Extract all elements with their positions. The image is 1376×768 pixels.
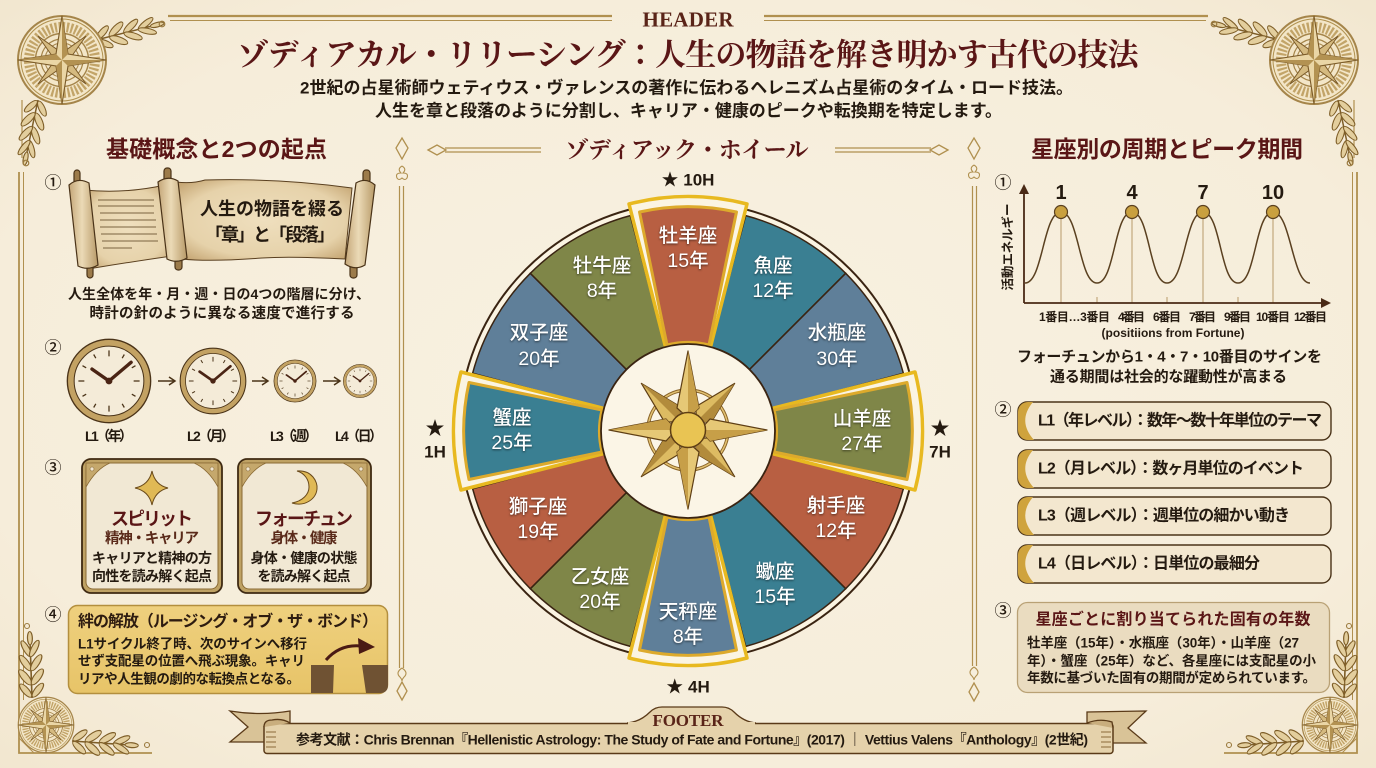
number 2: ② xyxy=(994,400,1012,420)
sign labels: 15年 xyxy=(754,586,796,608)
house marker 1H: ★ xyxy=(425,418,445,440)
chart: activity energy: 活動エネルギー xyxy=(1000,204,1015,290)
chart: activity energy: 4番目 xyxy=(1118,310,1145,324)
panel: left column xyxy=(44,136,388,694)
chart: activity energy: 1 xyxy=(1055,182,1067,204)
level L2: L2（月レベル）：数ヶ月単位のイベント xyxy=(1038,458,1304,478)
card: fortune: フォーチュン xyxy=(255,509,353,529)
number 1: ① xyxy=(44,174,62,192)
callout: loosing of the bond xyxy=(68,606,388,694)
icon: leap between cliffs xyxy=(311,638,388,693)
sign labels: 12年 xyxy=(752,280,794,302)
callout: fixed years: 牡羊座（15年）・水瓶座（30年）・山羊座（27 xyxy=(1027,634,1299,650)
sign labels: 27年 xyxy=(841,433,883,455)
sign labels: 20年 xyxy=(518,348,560,370)
heading: basics: 基礎概念と2つの起点 xyxy=(106,136,327,162)
house marker 1H: 1H xyxy=(424,442,446,462)
text: fortune signs: 通る期間は社会的な躍動性が高まる xyxy=(1050,368,1287,386)
sign labels: 25年 xyxy=(491,432,533,454)
house marker 4H: ★ 4H xyxy=(666,678,710,696)
callout: fixed years: 星座ごとに割り当てられた固有の年数 xyxy=(1036,610,1310,628)
footer ribbon xyxy=(230,707,1146,754)
sign labels: 天秤座 xyxy=(659,601,717,623)
chart: activity energy: 7 xyxy=(1197,182,1209,204)
icon: scroll: 「章」と「段落」 xyxy=(205,225,335,245)
corner ornament: top left xyxy=(11,10,167,168)
chart: activity energy: 9番目 xyxy=(1224,310,1251,324)
sign labels: 8年 xyxy=(673,626,703,648)
card: spirit: 精神・キャリア xyxy=(105,529,199,547)
card: fortune: 身体・健康の状態 xyxy=(250,550,358,566)
arrow xyxy=(252,377,268,385)
wheel xyxy=(453,196,923,666)
footer tab xyxy=(627,707,756,723)
clock L2 xyxy=(180,348,246,444)
references: 参考文献：Chris Brennan『Hellenistic Astrology: The Study of Fate and Fortune』(2017) ｜ Vettius Valens『Anthology』(2世紀) xyxy=(296,732,1088,748)
level L3 xyxy=(1018,497,1331,535)
panel: right column xyxy=(994,136,1331,692)
house marker 1H xyxy=(424,418,446,462)
arrow xyxy=(323,377,340,385)
level L1 xyxy=(1018,402,1331,440)
clock L4: L4（日） xyxy=(335,428,383,444)
icon: crescent moon xyxy=(292,471,317,504)
corner ornament: bottom left xyxy=(15,624,150,760)
card: fortune: を読み解く起点 xyxy=(258,568,350,584)
chart: activity energy: 6番目 xyxy=(1153,310,1181,324)
number 3: ③ xyxy=(994,602,1012,620)
heading ornament right xyxy=(835,145,948,155)
sign labels: 15年 xyxy=(667,250,709,272)
chart: activity energy: 4 xyxy=(1126,182,1138,204)
clock L3: L3（週） xyxy=(270,428,318,444)
chart: activity energy: 12番目 xyxy=(1294,310,1327,324)
chart: activity energy: (positiions from Fortune) xyxy=(1102,326,1244,340)
heading ornament left xyxy=(428,145,541,155)
sign labels: 30年 xyxy=(816,348,858,370)
card: fortune: 身体・健康 xyxy=(270,529,338,547)
arrow xyxy=(158,377,175,385)
sign labels: 19年 xyxy=(517,521,559,543)
level L4: L4（日レベル）：日単位の最細分 xyxy=(1038,554,1260,572)
subtitle: 2世紀の占星術師ウェティウス・ヴァレンスの著作に伝わるヘレニズム占星術のタイム・ロード技法。 xyxy=(300,78,1073,98)
sign labels: 8年 xyxy=(587,280,617,302)
sign labels: 魚座 xyxy=(753,255,793,277)
sign labels: 獅子座 xyxy=(509,496,567,518)
panel: zodiac wheel xyxy=(424,138,951,696)
sign labels: 山羊座 xyxy=(833,408,891,430)
level L3: L3（週レベル）：週単位の細かい動き xyxy=(1038,506,1290,524)
footer label: FOOTER xyxy=(652,711,724,730)
card: spirit: 向性を読み解く起点 xyxy=(92,568,212,584)
sign labels: 20年 xyxy=(579,591,621,613)
sign labels: 射手座 xyxy=(807,495,865,517)
text: fortune signs xyxy=(1017,348,1322,386)
heading: periods: 星座別の周期とピーク期間 xyxy=(1031,136,1303,162)
callout: loosing of the bond: 絆の解放（ルージング・オブ・ザ・ボンド） xyxy=(78,612,378,630)
sign labels: 牡牛座 xyxy=(573,255,631,277)
house marker 7H xyxy=(929,418,951,462)
sign labels: 乙女座 xyxy=(571,566,629,588)
icon: four-point star xyxy=(135,471,168,505)
number 1: ① xyxy=(994,174,1012,192)
corner ornament: bottom right xyxy=(1226,624,1361,760)
clock L1 xyxy=(67,339,151,444)
text: four levels xyxy=(68,286,370,322)
sign labels: 蠍座 xyxy=(755,561,795,583)
chart: activity energy: 10番目 xyxy=(1256,310,1290,324)
callout: loosing of the bond: L1サイクル終了時、次のサインへ移行 xyxy=(78,636,307,652)
level L2 xyxy=(1018,450,1331,488)
clock L2: L2（月） xyxy=(187,428,235,444)
clock L3 xyxy=(270,360,318,444)
level L4 xyxy=(1018,545,1331,583)
chart: activity energy: 7番目 xyxy=(1189,310,1216,324)
card: fortune xyxy=(238,459,371,593)
callout: fixed years xyxy=(1018,602,1330,692)
sign labels: 水瓶座 xyxy=(808,322,866,344)
header label: HEADER xyxy=(642,8,734,32)
text: four levels: 人生全体を年・月・週・日の4つの階層に分け、 xyxy=(68,286,370,302)
number 4: ④ xyxy=(44,606,62,624)
chart: activity energy: 10 xyxy=(1262,182,1284,204)
column dividers xyxy=(396,138,980,701)
callout: loosing of the bond: せず支配星の位置へ飛ぶ現象。キャリ xyxy=(78,652,305,668)
sign labels: 牡羊座 xyxy=(659,225,717,247)
text: four levels: 時計の針のように異なる速度で進行する xyxy=(90,304,354,322)
sign labels: 双子座 xyxy=(510,322,568,344)
sign labels: 12年 xyxy=(815,520,857,542)
level L1: L1（年レベル）：数年～数十年単位のテーマ xyxy=(1038,410,1322,430)
sign labels xyxy=(491,225,891,648)
card: spirit xyxy=(82,459,222,593)
icon: scroll xyxy=(69,168,375,278)
icon: scroll: 人生の物語を綴る xyxy=(200,199,344,219)
heading: zodiac wheel: ゾディアック・ホイール xyxy=(566,138,808,162)
subtitle: 人生を章と段落のように分割し、キャリア・健康のピークや転換期を特定します。 xyxy=(375,102,1002,120)
card: spirit: キャリアと精神の方 xyxy=(92,550,212,566)
house marker 7H: ★ xyxy=(930,418,950,440)
sign labels: 蟹座 xyxy=(492,407,532,429)
number 2: ② xyxy=(44,338,62,358)
clock L4 xyxy=(335,364,383,444)
title: ゾディアカル・リリーシング：人生の物語を解き明かす古代の技法 xyxy=(238,38,1142,72)
number 3: ③ xyxy=(44,458,62,478)
house marker 7H: 7H xyxy=(929,442,951,462)
subtitle xyxy=(300,78,1073,120)
corner ornament: top right xyxy=(1209,10,1365,168)
text: fortune signs: フォーチュンから1・4・7・10番目のサインを xyxy=(1017,348,1322,366)
card: spirit: スピリット xyxy=(111,509,193,529)
clock L1: L1（年） xyxy=(85,428,133,444)
chart: activity energy: 1番目…3番目 xyxy=(1039,310,1110,324)
chart: activity energy xyxy=(1000,182,1331,340)
callout: fixed years: 年数に基づいた固有の期間が定められています。 xyxy=(1027,670,1316,686)
icon: sun compass xyxy=(609,351,767,509)
house marker 10H: ★ 10H xyxy=(662,170,714,190)
callout: loosing of the bond: リアや人生観の劇的な転換点となる。 xyxy=(78,670,300,686)
callout: fixed years: 年）・蟹座（25年）など、各星座には支配星の小 xyxy=(1027,652,1316,668)
